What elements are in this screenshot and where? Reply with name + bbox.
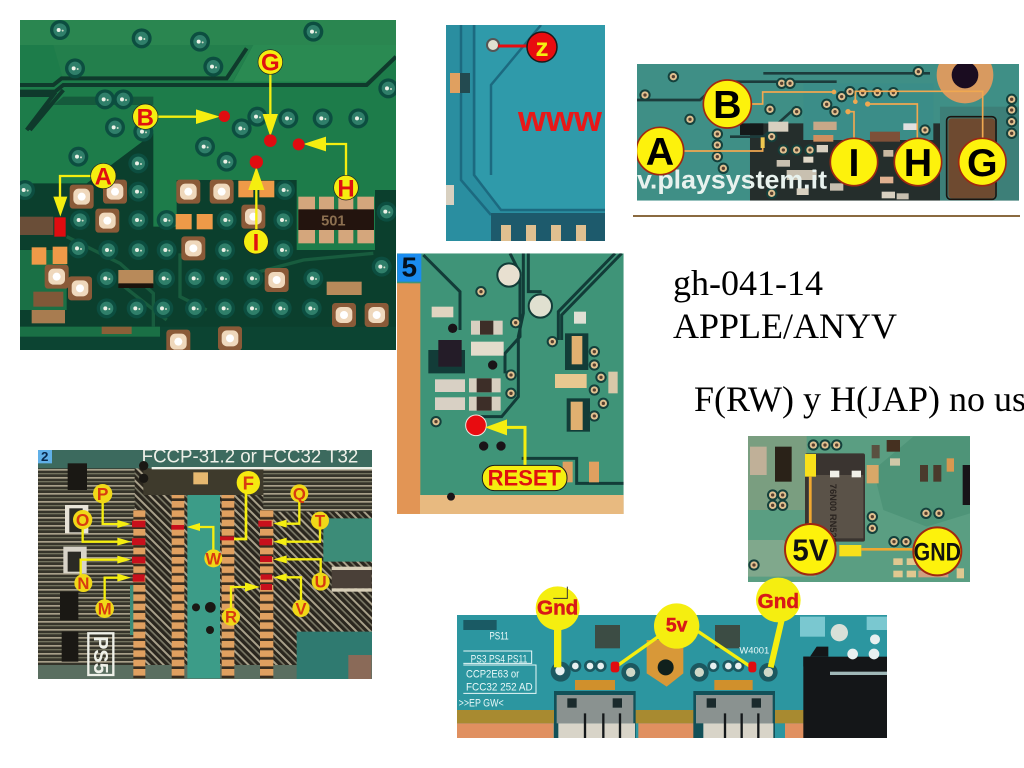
photo: PCB points M to W, panel 2: PS5 <box>89 636 111 674</box>
marker N <box>74 556 131 593</box>
marker M <box>95 574 131 619</box>
marker O <box>73 510 131 546</box>
board silkscreen text: PS11 <box>489 630 509 642</box>
marker R: R <box>225 608 237 627</box>
marker 5v <box>611 603 756 672</box>
marker B: B <box>713 83 742 127</box>
marker R <box>222 582 260 627</box>
marker H <box>293 137 358 202</box>
marker I: I <box>253 229 259 256</box>
marker 5V <box>785 454 836 575</box>
marker G: G <box>967 141 998 185</box>
marker T <box>273 512 329 546</box>
board silkscreen text: CCP2E63 or <box>466 668 520 680</box>
marker Gnd right <box>756 578 801 667</box>
photo: USB ports with Gnd and 5v points <box>457 578 887 738</box>
marker Z <box>487 32 557 62</box>
decorative vias <box>15 20 398 318</box>
marker B <box>703 80 836 128</box>
photo: PCB points M to W, panel 2 <box>38 446 372 679</box>
marker B <box>133 104 230 131</box>
photo: 5V and GND points: 76N00 RN529 <box>828 484 838 543</box>
marker W: W <box>205 549 221 568</box>
marker I <box>830 109 878 186</box>
note: unused points: F(RW) y H(JAP) no us <box>694 379 1024 419</box>
badge: number 2: 2 <box>41 449 48 464</box>
chip 501: 501 <box>321 214 346 230</box>
badge: number 2 <box>38 449 52 464</box>
marker Q: Q <box>293 484 306 503</box>
marker G <box>258 50 283 147</box>
marker H: H <box>337 175 355 202</box>
marker Z: z <box>536 32 548 62</box>
marker G: G <box>261 50 280 77</box>
marker 5v: 5v <box>666 616 688 637</box>
board silkscreen text <box>459 630 769 710</box>
board silkscreen text: FCC32 252 AD <box>466 682 533 694</box>
marker N: N <box>77 574 89 593</box>
USB port left <box>554 691 636 738</box>
marker GND: GND <box>914 539 961 567</box>
heading: model code: gh-041-14 <box>673 263 823 303</box>
marker Q <box>273 484 308 528</box>
marker U <box>273 555 330 592</box>
marker A: A <box>95 164 112 191</box>
marker T: T <box>315 512 325 531</box>
photo: RESET point, panel 5 <box>397 252 624 514</box>
chip 501 <box>298 197 374 243</box>
heading: chip names: APPLE/ANYV <box>673 306 897 346</box>
badge: number 5: 5 <box>402 252 417 283</box>
marker F: F <box>243 472 254 493</box>
marker W <box>187 523 222 568</box>
marker Gnd left <box>536 586 580 667</box>
marker B: B <box>137 104 154 131</box>
strip: cropped photo edge <box>633 215 1020 217</box>
marker A: A <box>646 130 674 174</box>
marker F <box>234 471 260 539</box>
photo: PCB point Z with www watermark <box>446 25 605 241</box>
marker I: I <box>849 141 859 185</box>
photo: PCB points with large labels A B I H G <box>637 64 1019 201</box>
marker H: H <box>904 141 932 185</box>
marker A <box>636 127 765 175</box>
marker G <box>853 91 1006 186</box>
marker RESET <box>466 415 567 491</box>
marker Gnd right: Gnd <box>758 590 799 613</box>
photo: 5V and GND points <box>748 436 970 582</box>
decorative text on board: FCCP-31.2 or FCC32 T32 <box>142 446 358 467</box>
marker H <box>865 101 942 186</box>
marker M: M <box>98 600 112 619</box>
marker P <box>93 484 131 528</box>
marker A <box>53 163 116 237</box>
board silkscreen text: >>EP GW< <box>459 698 504 710</box>
marker O: O <box>76 510 89 530</box>
board silkscreen text: W4001 <box>739 645 769 655</box>
marker U: U <box>315 573 327 592</box>
photo: PCB point Z with www watermark: www <box>517 98 603 139</box>
photo: PCB main points A B G H I <box>15 20 398 354</box>
marker P: P <box>97 484 108 504</box>
marker Gnd left: Gnd <box>537 597 578 620</box>
marker V: V <box>295 599 307 618</box>
marker GND <box>839 527 961 575</box>
board silkscreen text: PS3 PS4 PS11 <box>471 654 527 666</box>
watermark text: v.playsystem.it <box>637 164 827 194</box>
badge: number 5 <box>397 252 421 283</box>
marker V <box>273 573 310 618</box>
marker 5V: 5V <box>792 534 829 568</box>
marker RESET: RESET <box>488 466 562 491</box>
marker I <box>244 155 268 256</box>
USB port right <box>693 691 775 738</box>
